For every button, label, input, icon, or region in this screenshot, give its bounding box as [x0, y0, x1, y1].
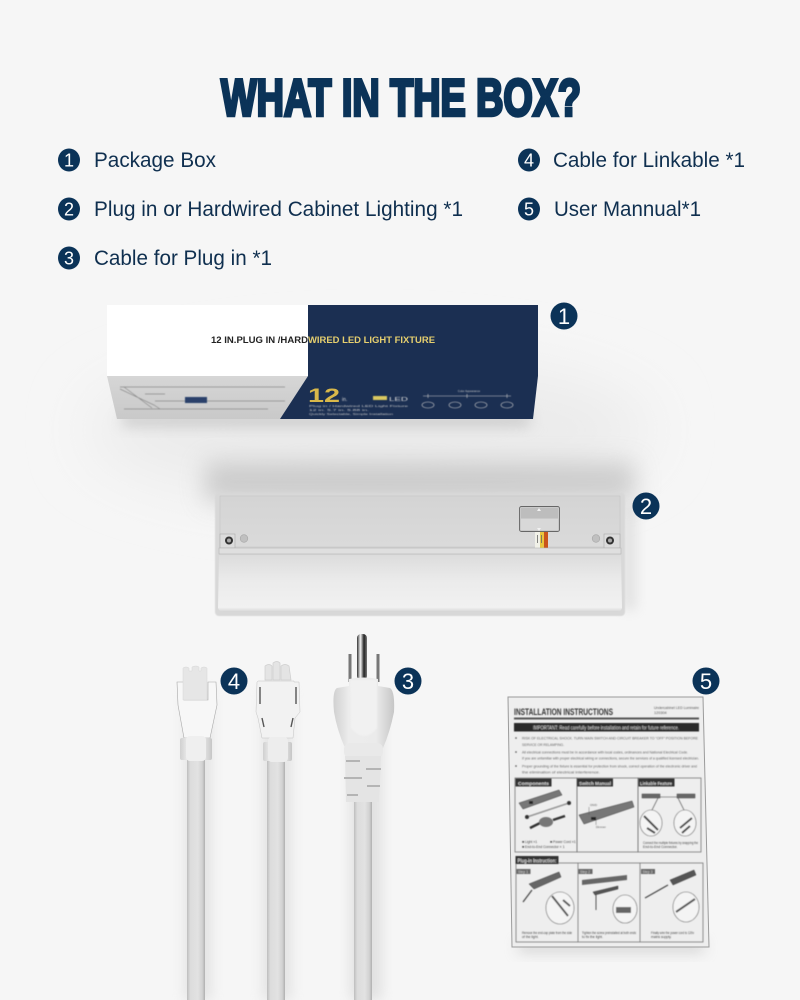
linkable feature panel: Linkable Feature	[640, 781, 672, 787]
badge 2: 2	[640, 494, 652, 519]
manual warnings: Proper grounding of the fixture is essential for protection from shock, correct operation of the electronic driver and	[522, 764, 697, 768]
under-cabinet light fixture	[205, 462, 636, 616]
linkable feature panel	[638, 778, 701, 852]
manual header	[514, 706, 699, 732]
list item 1: 1	[64, 150, 74, 170]
list item 3: 3	[64, 248, 74, 268]
wires	[535, 532, 548, 548]
plug prongs	[348, 634, 380, 682]
step 1: Remove the end-cap plate from the side	[522, 931, 572, 935]
step 2: to fix the light.	[582, 935, 603, 939]
title: WHAT IN THE BOX?	[221, 70, 581, 128]
step 3: Step 3	[642, 870, 653, 874]
list item 5: 5	[524, 200, 534, 220]
mounting plate	[220, 496, 620, 548]
badge 1	[550, 302, 578, 330]
switch manual panel: Switch Manual	[579, 781, 611, 787]
badge 5	[692, 668, 720, 694]
step 3	[641, 869, 699, 939]
manual warnings: All electrical connections must be in accordance with local codes, ordinances and National Electrical Code.	[522, 750, 688, 754]
step 3: mains supply.	[651, 935, 672, 939]
step 2	[578, 869, 637, 939]
list item 2: Plug in or Hardwired Cabinet Lighting *1	[94, 198, 463, 221]
power plug	[333, 634, 394, 1000]
manual warnings: RISK OF ELECTRICAL SHOCK. TURN MAIN SWITCH AND CIRCUIT BREAKER TO "OFF" POSITION BEFORE	[522, 736, 698, 740]
badge 3	[394, 668, 422, 694]
box front face: LED	[389, 397, 409, 403]
contents list	[58, 148, 745, 270]
linkable feature panel: Connect the multiple fixtures by snapping the	[643, 841, 698, 845]
switch	[520, 506, 560, 532]
box front face: Quickly Selectable, Simple Installation	[309, 412, 394, 416]
components panel: ■ End-to-End Connector × 1	[522, 845, 565, 849]
step 3: Finally wire the power cord to 120v	[651, 931, 694, 935]
manual warnings: If you are unfamiliar with proper electrical wiring or connections, secure the services of a qualified licensed electrician.	[522, 756, 699, 760]
badge 4: 4	[228, 669, 240, 694]
list item 4: 4	[524, 150, 534, 170]
badge 2	[632, 492, 660, 520]
step 1: of the light.	[522, 935, 539, 939]
manual warnings: SERVICE OR RELAMPING.	[522, 742, 564, 747]
box front face: 12 in. 5.7 in. 5.88 in.	[309, 408, 369, 412]
instruction manual	[508, 697, 709, 952]
badge 4	[220, 668, 248, 694]
step 1	[516, 869, 574, 939]
manual header: INSTALLATION INSTRUCTIONS	[514, 707, 613, 717]
box front face: 12	[308, 386, 340, 407]
box front face: Plug in / Hardwired LED Light Fixture	[309, 404, 409, 408]
step 1: Step 1	[518, 870, 528, 874]
strain relief	[344, 743, 383, 802]
manual header: Undercabinet LED Luminaire	[654, 706, 699, 710]
light diffuser	[218, 555, 622, 612]
linkable connector, female	[177, 666, 217, 1000]
badge 1: 1	[558, 304, 570, 329]
components panel: ■ Power Cord ×1	[550, 840, 576, 844]
badge 5: 5	[700, 669, 712, 694]
linkable feature panel: End-to-End Connector.	[643, 845, 678, 849]
step 2: Step 2	[580, 870, 590, 874]
components panel: Components	[518, 781, 549, 787]
manual warnings	[515, 736, 699, 774]
box top face: WIRED LED LIGHT FIXTURE	[308, 335, 436, 346]
switch manual panel: ON/D	[590, 803, 597, 807]
box front face	[107, 376, 538, 419]
package box	[107, 305, 538, 426]
box top face: 12 IN.PLUG IN /HARD	[211, 335, 308, 346]
plug-in instruction panel	[516, 856, 703, 942]
manual header: 120304	[654, 711, 667, 715]
box front face: Color Appearance	[458, 389, 481, 393]
list item 4: Cable for Linkable *1	[553, 149, 745, 172]
list item 2: 2	[64, 200, 74, 220]
step 2: Tighten the screw preinstalled at both ends	[582, 931, 636, 935]
list item 1: Package Box	[94, 149, 216, 172]
list item 5: User Mannual*1	[554, 198, 701, 221]
manual warnings: the elimination of electrical interference.	[522, 770, 600, 774]
box top face	[107, 305, 538, 376]
list item 3: Cable for Plug in *1	[94, 247, 272, 270]
linkable connector, male	[256, 662, 300, 1000]
badge 3: 3	[402, 669, 414, 694]
manual header: IMPORTANT: Read carefully before installation and retain for future reference.	[533, 726, 679, 732]
switch manual panel	[577, 778, 638, 852]
components panel: ■ Light ×1	[522, 840, 537, 844]
box front face: in.	[342, 397, 347, 403]
plug-in instruction panel: Plug-in Instruction:	[518, 858, 557, 864]
switch manual panel: Dimmer	[596, 825, 606, 829]
components panel	[515, 778, 577, 852]
